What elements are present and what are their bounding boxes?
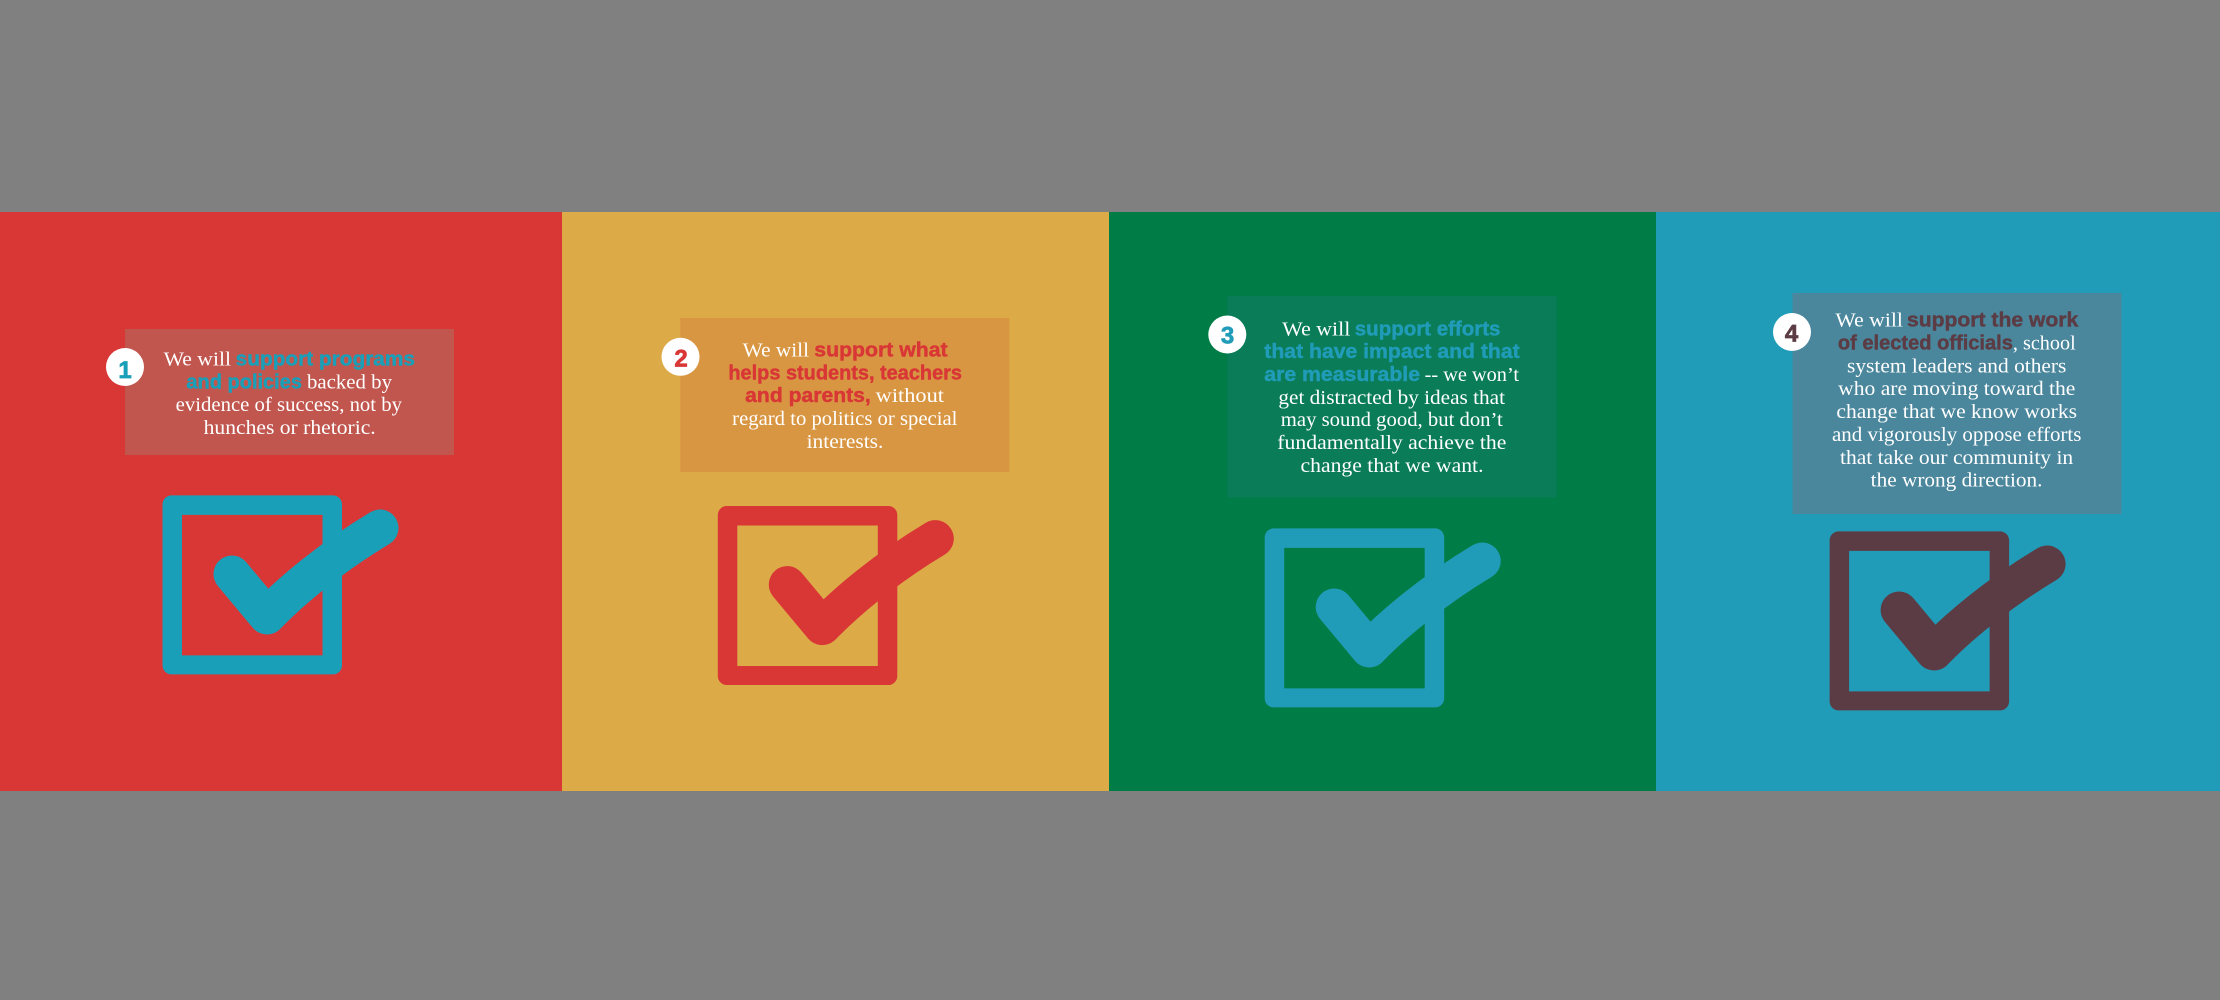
panel 2 statement: interests. bbox=[807, 431, 883, 453]
panel 3 text box bbox=[1228, 296, 1556, 498]
panel 1 statement: hunches or rhetoric. bbox=[204, 417, 376, 439]
panel 1: red bbox=[0, 212, 562, 791]
panel 2: gold bbox=[562, 212, 1109, 791]
panel 3 statement: fundamentally achieve the bbox=[1277, 432, 1506, 454]
panel 2 text box bbox=[680, 318, 1009, 472]
panel 2 statement: helps students, teachers bbox=[728, 362, 962, 384]
panel 4 statement: the wrong direction. bbox=[1871, 469, 2042, 491]
panel 1 statement: and policies bbox=[186, 371, 302, 393]
panel 3 statement: that have impact and that bbox=[1264, 341, 1520, 363]
panel 4 number badge: 4 bbox=[1785, 320, 1799, 348]
panel 4: blue bbox=[1656, 212, 2220, 791]
panel 3 statement: get distracted by ideas that bbox=[1278, 387, 1505, 409]
panel 2 statement: and parents, bbox=[745, 385, 871, 407]
panel 3 checkbox icon bbox=[1265, 528, 1482, 707]
panel 3 statement: are measurable bbox=[1264, 364, 1420, 386]
panel 4 statement: support the work bbox=[1907, 310, 2079, 332]
panel 4 statement: , school bbox=[2013, 333, 2076, 355]
panel 3 statement: may sound good, but don’t bbox=[1281, 409, 1503, 431]
panel 2 statement: without bbox=[876, 385, 944, 407]
panel 4 statement: We will bbox=[1835, 310, 1903, 332]
panel 4 statement: that take our community in bbox=[1840, 447, 2073, 469]
panel 1 checkbox icon bbox=[162, 495, 380, 674]
panel 3 statement: change that we want. bbox=[1300, 455, 1484, 477]
panel 2 number badge: 2 bbox=[674, 345, 688, 372]
panel 4 statement: who are moving toward the bbox=[1838, 378, 2075, 400]
panel 1 number badge bbox=[106, 348, 144, 386]
panel 1 statement: evidence of success, not by bbox=[176, 394, 403, 416]
panel 4 checkbox icon bbox=[1830, 531, 2047, 710]
panel 4 statement: change that we know works bbox=[1836, 401, 2077, 423]
panel 3 number badge: 3 bbox=[1221, 322, 1234, 350]
panel 4 statement bbox=[1832, 310, 2081, 491]
panel 2 number badge bbox=[662, 338, 700, 376]
panel 2 statement: support what bbox=[814, 340, 948, 362]
panel 1 statement: We will bbox=[164, 348, 231, 370]
panel 2 statement: regard to politics or special bbox=[732, 408, 958, 430]
panel 1 statement bbox=[164, 348, 415, 439]
panel 1 text box bbox=[125, 329, 454, 455]
panel 4 statement: of elected officials bbox=[1838, 333, 2013, 355]
panel 4 statement: system leaders and others bbox=[1847, 356, 2066, 378]
panel 3 statement bbox=[1264, 318, 1520, 477]
panel 3 number badge bbox=[1208, 316, 1246, 354]
panel 2 checkbox icon bbox=[718, 506, 935, 685]
panel 4 text box bbox=[1792, 293, 2122, 514]
panel 3: green bbox=[1109, 212, 1656, 791]
panel 4 statement: and vigorously oppose efforts bbox=[1832, 424, 2081, 446]
panel 3 statement: -- we won’t bbox=[1425, 364, 1519, 386]
panel 1 number badge: 1 bbox=[118, 357, 132, 384]
panel 2 statement bbox=[728, 340, 962, 453]
panel 1 statement: support programs bbox=[236, 348, 415, 370]
panel 3 statement: We will bbox=[1282, 318, 1351, 340]
panel 4 number badge bbox=[1773, 313, 1811, 351]
panel 3 statement: support efforts bbox=[1355, 318, 1500, 340]
panel 2 statement: We will bbox=[743, 340, 809, 362]
panel 1 statement: backed by bbox=[307, 371, 393, 393]
